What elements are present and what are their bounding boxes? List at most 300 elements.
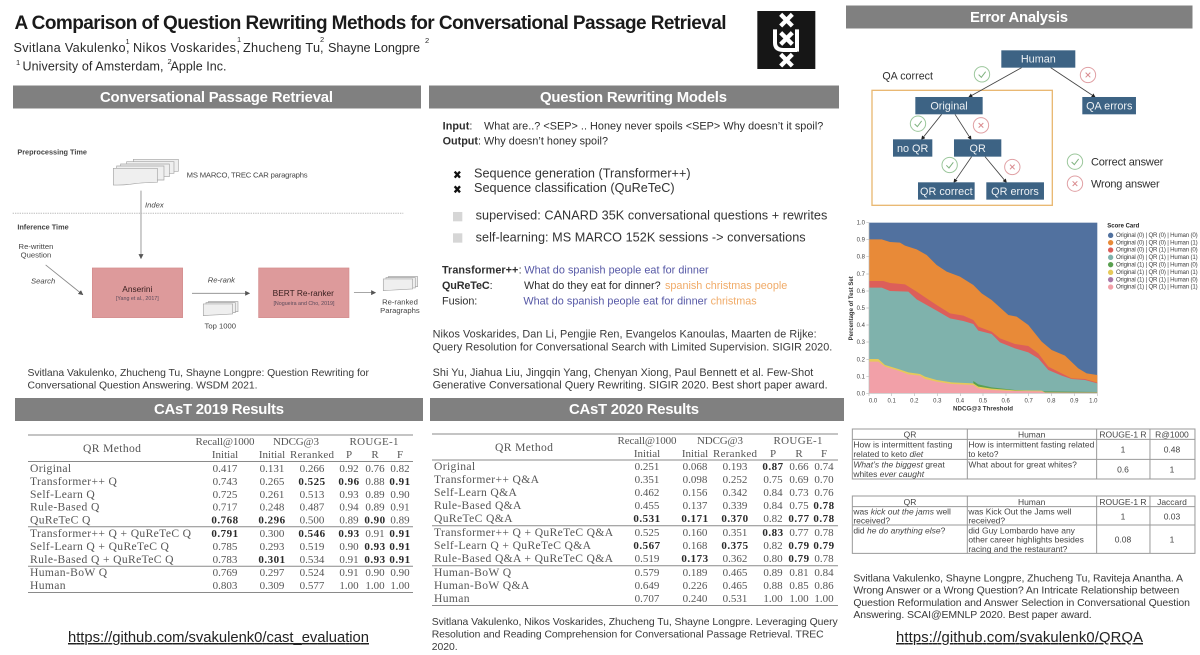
row: 0.525	[298, 476, 326, 488]
table header: F	[821, 448, 827, 460]
panel: CAsT 2019 heading: CAsT 2019 Results	[154, 402, 284, 418]
row: 0.783	[213, 554, 238, 566]
row: 0.769	[213, 567, 238, 579]
legend: score card: Score Card	[1107, 223, 1140, 229]
table header: Initial	[212, 449, 238, 461]
row: Self-Learn Q&A	[434, 486, 518, 499]
table 1 row 1: related to keto diet	[853, 449, 924, 459]
node: Original: Original	[930, 101, 968, 113]
table header: P	[346, 449, 352, 461]
row: 0.91	[365, 528, 385, 540]
row: 0.791	[211, 528, 239, 540]
table 1 row 1: 1	[1121, 445, 1126, 455]
list: training data: supervised: CANARD 35K conversational questions + rewrites	[476, 209, 827, 223]
row: 0.78	[814, 527, 834, 539]
citation: TREC 2020: 2020.	[432, 642, 458, 653]
authors: 2	[320, 35, 324, 44]
row	[30, 527, 411, 540]
authors: Shayne Longpre	[328, 41, 420, 55]
example: fusion: Fusion:	[442, 295, 477, 307]
affiliations: 2	[168, 57, 172, 66]
example: qureTeC: QuReTeC	[442, 280, 490, 292]
link: QRQA: https://github.com/svakulenk0/QRQA	[896, 630, 1143, 646]
row: 0.156	[683, 487, 708, 499]
node: Original	[915, 97, 983, 114]
node: no QR: no QR	[897, 143, 928, 155]
row	[434, 539, 835, 552]
row: 0.301	[258, 554, 286, 566]
panel: CAsT 2020 heading	[430, 398, 844, 421]
citation: Yu	[433, 367, 828, 392]
list: training data	[453, 209, 827, 245]
node: QR	[954, 139, 1001, 157]
x axis: 1.0	[1089, 398, 1098, 404]
authors: Svitlana Vakulenko	[14, 41, 126, 55]
legend: score card: Original (1) | QR (1) | Human (1)	[1116, 284, 1198, 291]
row: 0.79	[813, 540, 835, 552]
node: no QR	[893, 139, 932, 157]
citation: SCAI@EMNLP 2020	[853, 573, 1190, 621]
row: 0.77	[789, 527, 809, 539]
row: 0.803	[213, 580, 238, 592]
row: 0.309	[260, 580, 285, 592]
y axis title: Percentage of Test Set	[849, 276, 855, 340]
row: 0.90	[364, 514, 386, 526]
citation: WSDM 2021	[28, 368, 370, 392]
row: Rule-Based Q&A	[434, 499, 522, 512]
authors: Zhucheng Tu	[243, 41, 320, 55]
label: re-written question: Question	[21, 251, 51, 260]
table 1 header: QR	[904, 429, 916, 439]
table header: Initial	[634, 448, 660, 460]
table header: Reranked	[713, 448, 758, 460]
citation: Voskarides: Query Resolution for Conversational Search with Limited Supervision. SIGIR 2020.	[433, 341, 832, 353]
row	[434, 526, 834, 539]
x axis title: NDCG@3 Threshold	[953, 406, 1013, 413]
row: Transformer++ Q + QuReTeC Q&A	[434, 526, 614, 539]
affiliations: University of Amsterdam,	[22, 60, 164, 74]
row: 0.79	[788, 553, 810, 565]
row: 0.768	[211, 514, 239, 526]
row: Human-BoW Q	[30, 566, 108, 579]
table header: R	[795, 448, 803, 460]
row: 0.93	[339, 489, 359, 501]
panel: CAsT 2019 heading	[15, 398, 423, 421]
row: 0.91	[389, 541, 411, 553]
row: 0.297	[260, 567, 285, 579]
table 1 row 2: What’s the biggest great	[853, 460, 945, 470]
row: 0.93	[364, 554, 386, 566]
row: 0.098	[683, 474, 708, 486]
example: fusion: christmas	[711, 295, 757, 307]
panel: error analysis heading	[846, 6, 1192, 28]
row: Transformer++ Q	[30, 475, 118, 488]
row: 0.69	[789, 474, 809, 486]
x axis: 0.1	[887, 398, 896, 404]
row: 0.240	[683, 593, 708, 605]
area layers	[869, 223, 1097, 393]
icon: document stack	[113, 159, 178, 185]
x axis: 0.9	[1070, 398, 1079, 404]
highlight box	[872, 90, 1052, 205]
row: 0.171	[681, 513, 709, 525]
row: 0.500	[300, 514, 325, 526]
label: inference time: Inference Time	[17, 222, 69, 231]
row: 0.168	[683, 540, 708, 552]
row: Self-Learn Q + QuReTeC Q	[30, 540, 170, 553]
row: 0.75	[763, 474, 783, 486]
icon: check	[910, 116, 926, 131]
row: 0.84	[814, 567, 834, 579]
row: 0.293	[260, 541, 285, 553]
icon: cross	[973, 118, 989, 133]
row: 0.90	[339, 541, 359, 553]
row: 0.137	[683, 500, 708, 512]
arrow: search	[46, 265, 83, 295]
legend: score card: Original (0) | QR (1) | Human (0)	[1116, 247, 1198, 254]
label: re-ranked paragraphs	[380, 297, 420, 315]
table 1 header	[904, 429, 1189, 439]
x axis: 0.8	[1047, 398, 1056, 404]
y axis	[857, 221, 869, 397]
label: collections: MS MARCO, TREC CAR paragraphs	[187, 171, 308, 180]
panel: question rewriting models heading	[429, 86, 839, 108]
legend: score card: Original (1) | QR (0) | Human (1)	[1116, 269, 1198, 276]
row: 0.91	[390, 502, 410, 514]
panel: question rewriting models content	[433, 120, 832, 392]
row	[30, 579, 410, 592]
row: 0.83	[762, 527, 784, 539]
citation: SCAI@EMNLP 2020: Svitlana Vakulenko, Shayne Longpre, Zhucheng Tu, Raviteja Anantha. A	[853, 573, 1183, 584]
table 2 row 2: 1	[1170, 535, 1175, 545]
y axis: 0.1	[857, 374, 866, 380]
icon: cross	[1080, 67, 1096, 83]
citation: TREC 2020: Resolution and Reading Comprehension for Conversational Passage Retrieval. TREC	[432, 630, 824, 640]
example: transformer++	[442, 264, 709, 276]
row	[434, 460, 834, 473]
row: 0.86	[814, 580, 834, 592]
example: transformer++: :	[519, 264, 522, 276]
row: 0.84	[763, 487, 783, 499]
row: Self-Learn Q	[30, 488, 95, 501]
citation: Yu: Generative Conversational Query Rewriting. SIGIR 2020. Best short paper award.	[433, 380, 828, 392]
authors	[14, 35, 429, 55]
label: index: Index	[145, 201, 165, 210]
row	[30, 553, 411, 566]
row	[434, 566, 834, 579]
node: QR: QR	[970, 143, 986, 155]
table: CAsT 2019 results	[28, 435, 413, 592]
table header: NDCG@3	[697, 435, 744, 447]
row: 0.534	[300, 554, 325, 566]
row: 0.266	[300, 463, 325, 475]
node: Human: Human	[1021, 54, 1056, 66]
example: qureTeC	[442, 280, 787, 292]
row: 0.91	[339, 554, 359, 566]
row: 0.261	[260, 489, 284, 501]
row: 0.743	[213, 476, 238, 488]
row: 0.75	[789, 500, 809, 512]
row: 0.351	[723, 527, 747, 539]
row: 0.300	[260, 528, 285, 540]
label: re-rank: Re-rank	[208, 275, 236, 284]
row: 0.90	[390, 489, 410, 501]
table 1 header: Human	[1018, 429, 1046, 439]
citation: TREC 2020	[432, 617, 838, 653]
legend: score card: Original (0) | QR (0) | Human (0)	[1116, 232, 1198, 239]
citation: TREC 2020: Svitlana Vakulenko, Nikos Voskarides, Zhucheng Tu, Shayne Longpre. Leveraging Query	[432, 617, 838, 628]
y axis: 0.4	[857, 323, 866, 329]
row: 0.89	[390, 514, 410, 526]
table: QR vs human ROUGE and Jaccard examples	[852, 496, 1195, 554]
row: 0.487	[300, 502, 325, 514]
row: 0.252	[723, 474, 747, 486]
node: QR errors	[986, 182, 1044, 200]
label: preprocessing time: Preprocessing Time	[17, 147, 87, 156]
table header: F	[397, 449, 403, 461]
box: bert re-ranker	[259, 268, 349, 318]
node: QR errors: QR errors	[991, 186, 1039, 198]
table 1 row 2: 1	[1170, 465, 1175, 475]
citation: SCAI@EMNLP 2020: Answering. SCAI@EMNLP 2020. Best paper award.	[853, 610, 1092, 621]
table 2 row 1: 1	[1121, 511, 1126, 521]
row: Human-BoW Q&A	[434, 579, 530, 592]
citation: WSDM 2021: Conversational Question Answering. WSDM 2021.	[28, 380, 258, 392]
legend: score card: Original (0) | QR (0) | Human (1)	[1116, 239, 1198, 246]
box: anserini: [Yang et al., 2017]	[116, 296, 159, 302]
row: 0.455	[635, 500, 660, 512]
table header: NDCG@3	[273, 436, 320, 448]
example: fusion: What do spanish people eat for dinner	[523, 295, 708, 307]
row: 0.707	[635, 593, 660, 605]
table 2 row 2: did he do anything else?	[853, 525, 946, 535]
table 2 row 1: 0.03	[1164, 511, 1181, 521]
row: 0.173	[681, 553, 709, 565]
row: 0.339	[723, 500, 748, 512]
row: 0.193	[723, 461, 748, 473]
chart: stacked area of score card by NDCG threshold	[849, 221, 1198, 413]
table header: ROUGE-1	[774, 435, 822, 447]
citation: SCAI@EMNLP 2020: Wrong Answer or a Wrong Question? An Intricate Relationship between	[853, 586, 1179, 597]
x axis: 0.2	[910, 398, 919, 404]
x axis	[869, 393, 1098, 404]
authors: Nikos Voskarides	[133, 41, 236, 55]
table 2 header	[904, 497, 1187, 507]
table 1 header: ROUGE-1 R	[1099, 429, 1147, 439]
row: Original	[30, 462, 72, 475]
row: 1.00	[814, 593, 834, 605]
node: QR correct	[918, 182, 975, 200]
row: 0.785	[213, 541, 238, 553]
row: 0.89	[365, 489, 385, 501]
row	[434, 512, 835, 525]
authors: ,	[126, 41, 130, 55]
authors: 1	[126, 37, 130, 46]
panel: error analysis tree	[872, 50, 1164, 205]
row: 0.265	[260, 476, 285, 488]
legend: score card: Original (1) | QR (0) | Human (0)	[1116, 261, 1198, 268]
input example: Input	[443, 120, 470, 132]
row: 0.78	[814, 553, 834, 565]
output example: Why doesn’t honey spoil?	[484, 136, 608, 148]
row: 0.513	[300, 489, 325, 501]
row: QuReTeC Q	[30, 514, 91, 526]
row: 0.78	[813, 500, 835, 512]
citation: Voskarides	[433, 329, 832, 353]
citation: SCAI@EMNLP 2020: Question Reformulation and Answer Selection in Conversational Question	[853, 598, 1190, 609]
table header: QR Method	[495, 441, 553, 454]
node: QA errors	[1082, 97, 1136, 114]
row: 0.91	[389, 554, 411, 566]
row: 0.519	[300, 541, 325, 553]
table 1 row 1: How is intermittent fasting	[853, 440, 953, 450]
arrow: to re-ranked	[354, 291, 375, 294]
table 2 row 2: 0.08	[1115, 535, 1132, 545]
row: 0.94	[339, 502, 359, 514]
affiliations	[16, 57, 226, 74]
legend: score card: Original (1) | QR (1) | Human (0)	[1116, 276, 1198, 283]
table 2 row 2: other career highlights besides	[968, 535, 1084, 545]
row	[434, 499, 835, 512]
row: 0.87	[762, 461, 784, 473]
y axis: 0.3	[857, 340, 866, 346]
row: 0.88	[763, 580, 783, 592]
title: A Comparison of Question Rewriting Methods for Conversational Passage Retrieval	[14, 13, 726, 34]
row: 0.74	[814, 461, 834, 473]
row: 0.85	[789, 580, 809, 592]
row: 0.546	[298, 528, 326, 540]
row: 0.91	[389, 476, 411, 488]
citation: WSDM 2021: Svitlana Vakulenko, Zhucheng Tu, Shayne Longpre: Question Rewriting for	[28, 368, 370, 379]
row: 0.66	[789, 461, 809, 473]
row: 0.89	[339, 514, 359, 526]
row: 0.84	[763, 500, 783, 512]
row: 0.89	[365, 502, 385, 514]
legend: correct answer	[1067, 154, 1164, 169]
table 2 row 1: was Kick Out the Jams well	[967, 506, 1072, 516]
table header: Recall@1000	[618, 435, 677, 447]
x axis: 0.6	[1001, 398, 1010, 404]
y axis: 0.5	[857, 306, 866, 312]
box: bert re-ranker: BERT Re-ranker	[273, 288, 334, 298]
example: fusion	[442, 295, 757, 307]
example: transformer++: What do spanish people eat for dinner	[524, 264, 709, 276]
example: qureTeC: What do they eat for dinner?	[524, 280, 661, 292]
row: 0.91	[339, 567, 359, 579]
list: model types: Sequence classification (QuReTeC)	[474, 181, 675, 195]
label: re-ranked paragraphs: Paragraphs	[380, 306, 420, 315]
icon: top 1000 stack	[203, 302, 238, 316]
row: 0.248	[260, 502, 285, 514]
input example: :	[469, 120, 472, 132]
row	[30, 462, 410, 475]
legend: wrong answer	[1067, 176, 1160, 191]
row: 0.96	[338, 476, 360, 488]
table header: QR Method	[83, 442, 141, 455]
arrow: re-rank	[192, 292, 249, 295]
row: 0.465	[723, 580, 748, 592]
table: QR vs human ROUGE and recall examples	[852, 429, 1195, 479]
row: Transformer++ Q&A	[434, 473, 540, 486]
panel: retrieval pipeline diagram	[13, 147, 420, 330]
row: 0.351	[635, 474, 659, 486]
tree arrows	[922, 68, 1095, 182]
list: model types	[455, 166, 691, 195]
icon: cross	[1005, 159, 1020, 175]
authors: ,	[320, 41, 324, 55]
link: cast_evaluation: https://github.com/svakulenk0/cast_evaluation	[68, 630, 369, 646]
icon: re-ranked stack	[383, 277, 418, 291]
icon: check	[942, 157, 957, 173]
label: re-ranked paragraphs: Re-ranked	[382, 297, 418, 306]
row: 0.068	[683, 461, 708, 473]
table 2 header: QR	[904, 497, 916, 507]
input example: What are..? <SEP> .. Honey never spoils <SEP> Why doesn’t it spoil?	[484, 120, 823, 132]
table 1 row 2	[852, 460, 1175, 479]
row: 0.524	[300, 567, 325, 579]
y axis: 0.9	[857, 238, 866, 244]
row: 0.531	[723, 593, 747, 605]
row: 0.89	[763, 567, 783, 579]
list: model types: Sequence generation (Transformer++)	[474, 166, 691, 180]
table header: Initial	[682, 448, 708, 460]
node: QR correct: QR correct	[920, 186, 973, 198]
panel: question rewriting models heading: Question Rewriting Models	[540, 90, 727, 106]
row	[30, 488, 410, 501]
table 2 header: Human	[1018, 497, 1046, 507]
row: 0.82	[763, 513, 783, 525]
box: anserini	[92, 268, 183, 318]
row	[30, 540, 411, 553]
legend: wrong answer: Wrong answer	[1091, 178, 1160, 190]
list: training data: self-learning: MS MARCO 152K sessions -> conversations	[476, 231, 806, 245]
y axis: 0.6	[857, 289, 866, 295]
row: 1.00	[339, 580, 359, 592]
table header	[495, 435, 827, 460]
logo: University of Amsterdam	[757, 11, 815, 69]
y axis: 1.0	[857, 221, 866, 227]
y axis: 0.7	[857, 272, 866, 278]
x axis: 0.0	[869, 398, 878, 404]
row	[434, 552, 834, 565]
label: top 1000: Top 1000	[205, 321, 236, 330]
affiliations: Apple Inc.	[170, 60, 226, 74]
legend: score card: Original (0) | QR (1) | Human (1)	[1116, 254, 1198, 261]
row: 0.90	[390, 567, 410, 579]
table 1 row 1	[853, 440, 1181, 459]
row: 0.465	[723, 567, 748, 579]
row: 0.131	[260, 463, 284, 475]
row: Original	[434, 460, 476, 473]
table 2 header: Jaccard	[1157, 497, 1187, 507]
row: 0.70	[814, 474, 834, 486]
row: 0.531	[633, 513, 661, 525]
row: 0.91	[389, 528, 411, 540]
authors: 2	[425, 36, 429, 45]
row: Human-BoW Q	[434, 566, 512, 579]
panel: CAsT 2020 heading: CAsT 2020 Results	[569, 402, 699, 418]
row: Self-Learn Q + QuReTeC Q&A	[434, 539, 592, 552]
row: 1.00	[789, 593, 809, 605]
row: 0.90	[365, 567, 385, 579]
row: 0.342	[723, 487, 747, 499]
row: 0.77	[788, 513, 810, 525]
table 2 row 2: did Guy Lombardo have any	[968, 525, 1076, 535]
row: 0.81	[789, 567, 809, 579]
row: 0.579	[635, 567, 660, 579]
row: 0.76	[814, 487, 834, 499]
row: 0.82	[763, 540, 783, 552]
